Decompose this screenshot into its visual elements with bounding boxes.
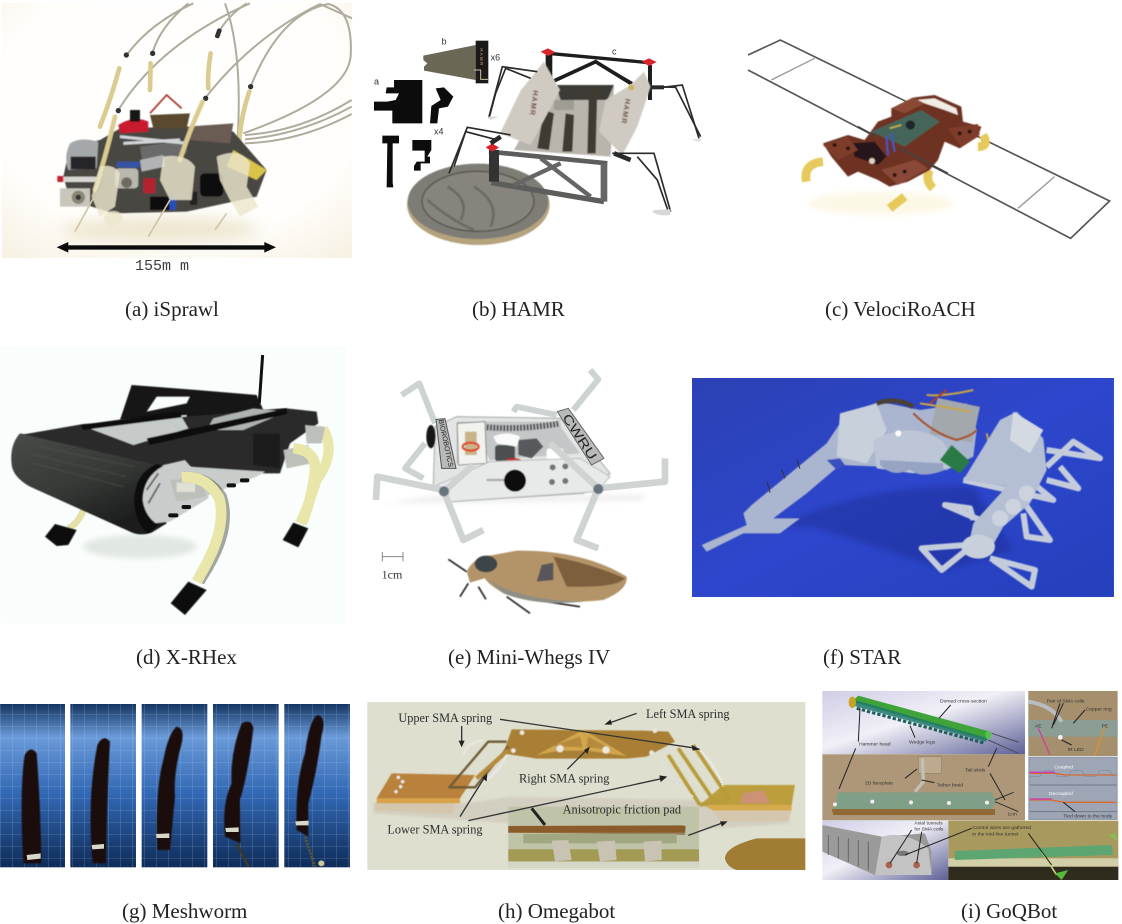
BIOROBOTICS and CWRU plates <box>436 408 604 468</box>
panel: GoQBot composite figure <box>822 691 1118 880</box>
panel: STAR robot photo <box>692 378 1114 597</box>
sub-panel e: photo inset <box>1028 691 1118 756</box>
left linkage <box>449 740 508 787</box>
parts: labels: b <box>442 36 447 46</box>
rear whegs <box>402 370 598 478</box>
ground shadow <box>60 217 260 243</box>
legs <box>449 67 701 213</box>
carrying handles <box>120 385 287 437</box>
callout labels: Copper ring <box>1086 706 1112 712</box>
caption: a: (a) iSprawl <box>125 297 219 321</box>
sub-panel c: cross section <box>822 821 948 880</box>
yellow C-legs <box>806 135 985 208</box>
strip over robot <box>858 127 948 173</box>
panel: Mini-Whegs IV robot and cockroach <box>376 370 665 613</box>
parts: labels: c <box>612 46 617 56</box>
rubber feet <box>45 523 308 615</box>
robot body <box>57 95 267 226</box>
inset: anisotropic friction pad <box>508 807 699 867</box>
caption: e: (e) Mini-Whegs IV <box>448 645 610 669</box>
parts: labels <box>374 36 617 137</box>
brown chassis <box>823 95 981 187</box>
callout labels: for SMA coils <box>914 826 944 832</box>
antenna <box>259 355 263 403</box>
pad shadow <box>373 797 793 830</box>
callout labels: Coupled <box>1054 764 1073 770</box>
carbon fibre shell <box>11 433 208 534</box>
body flaps and transmission: HAMR <box>619 98 633 125</box>
black wire tips <box>116 28 253 113</box>
sub-panel d: photo <box>948 821 1118 880</box>
parts: labels: x4 <box>434 127 443 137</box>
caption: h: (h) Omegabot <box>498 899 615 923</box>
callout labels: Tether braid <box>937 783 963 789</box>
silver end plate <box>140 460 208 523</box>
tail body <box>702 398 980 552</box>
callout labels: Left SMA spring <box>646 707 730 721</box>
callout labels: Anisotropic friction pad <box>563 802 682 816</box>
frame 3 <box>142 704 207 867</box>
callout labels: 2D faceplate <box>865 780 893 786</box>
callout labels: IR LED <box>1068 747 1084 753</box>
BIOROBOTICS and CWRU plates: CWRU <box>559 411 599 462</box>
foot glow <box>808 192 955 215</box>
panel: Omegabot photo <box>367 702 805 870</box>
right linkage <box>668 745 730 805</box>
blue and silver gearbox <box>117 162 140 168</box>
parts: part b <box>423 41 488 83</box>
frame 2 <box>70 704 136 867</box>
wing strip outline <box>748 40 1110 238</box>
rear legs <box>68 428 329 528</box>
callout labels <box>387 707 730 836</box>
lower leg sleeves <box>95 102 203 190</box>
front hips <box>170 425 325 502</box>
callout labels: Hammer head <box>859 742 891 748</box>
parts: labels: x6 <box>491 52 500 62</box>
caption: i: (i) GoQBot <box>961 899 1057 923</box>
bridge <box>503 728 675 759</box>
callout labels: Wedge legs <box>909 739 936 745</box>
callout labels: Right SMA spring <box>519 772 609 786</box>
parts: labels: a <box>374 77 379 87</box>
callout labels: Tied down to the body <box>1063 814 1113 820</box>
thin lower feet <box>75 180 227 237</box>
translucent hips <box>92 153 258 226</box>
coin <box>725 838 805 870</box>
sub-panel a: CAD model <box>822 691 1025 754</box>
flexible wire legs <box>118 3 352 143</box>
frame 5 <box>284 704 350 867</box>
caption: g: (g) Meshworm <box>122 899 247 923</box>
cockroach <box>448 551 627 613</box>
motor cylinder <box>66 140 98 170</box>
caption: f: (f) STAR <box>823 645 901 669</box>
callout labels: 1cm <box>1007 812 1017 818</box>
body flaps and transmission <box>500 62 651 157</box>
shadows <box>780 486 1013 570</box>
front whegs <box>376 443 665 548</box>
callout arrows <box>460 713 723 835</box>
callout labels: Decoupled <box>1049 791 1073 797</box>
callout labels: Lower SMA spring <box>387 822 483 836</box>
callout labels: Domed cross-section <box>940 698 987 704</box>
near and far legs <box>922 442 1100 587</box>
left foot <box>375 773 475 814</box>
tan leg sleeves <box>100 53 249 147</box>
caption: b: (b) HAMR <box>472 297 565 321</box>
scale text: 155m m <box>135 258 189 275</box>
wiring <box>877 390 993 460</box>
callout labels: in the mid-line tunnel <box>972 832 1018 838</box>
sub-panel b: fabricated robot <box>822 754 1025 820</box>
parts: folded black pieces a <box>374 80 453 187</box>
callout labels: Axial tunnels <box>914 820 943 826</box>
wiring cluster <box>200 173 223 197</box>
scale label: 1cm <box>382 568 403 582</box>
chassis frame <box>489 53 650 202</box>
caption: d: (d) X-RHex <box>136 645 237 669</box>
callout lines <box>839 703 1085 865</box>
callout labels: Pair of SMA coils <box>1047 698 1085 704</box>
front body spine <box>962 412 1047 559</box>
coin <box>407 164 550 245</box>
right foot <box>702 785 795 822</box>
frame 4 <box>213 704 279 867</box>
panel: VelociRoACH robot photo <box>748 40 1110 238</box>
callout labels: Tail skids <box>965 768 986 774</box>
panel: X-RHex robot photo <box>0 347 347 623</box>
callout labels: PE <box>1102 724 1109 730</box>
callout labels: AE <box>1035 724 1042 730</box>
panel: iSprawl robot photo <box>2 3 352 275</box>
BIOROBOTICS and CWRU plates: BIOROBOTICS <box>437 419 454 468</box>
scale arrow <box>57 242 276 253</box>
sub-panel f: coupled diagram <box>1028 757 1118 820</box>
frame 1 <box>0 704 65 867</box>
callout labels: Control wires are gathered <box>972 825 1031 831</box>
body flaps and transmission: HAMR <box>528 90 540 117</box>
shadow <box>383 495 643 503</box>
chassis <box>426 417 610 502</box>
caption: c: (c) VelociRoACH <box>825 297 976 321</box>
top deck <box>20 408 318 503</box>
callout labels <box>859 698 1113 838</box>
panel: HAMR robot photo <box>374 36 702 245</box>
red corner markers <box>486 48 657 152</box>
ground shadow <box>83 535 197 558</box>
circuit board <box>940 445 970 473</box>
callout labels: Upper SMA spring <box>398 711 492 725</box>
pins <box>767 459 800 493</box>
parts: part b: HAMR <box>479 48 484 66</box>
scale bar <box>382 552 403 561</box>
panel: Meshworm frames <box>0 704 350 867</box>
yellow C-legs <box>182 448 315 582</box>
